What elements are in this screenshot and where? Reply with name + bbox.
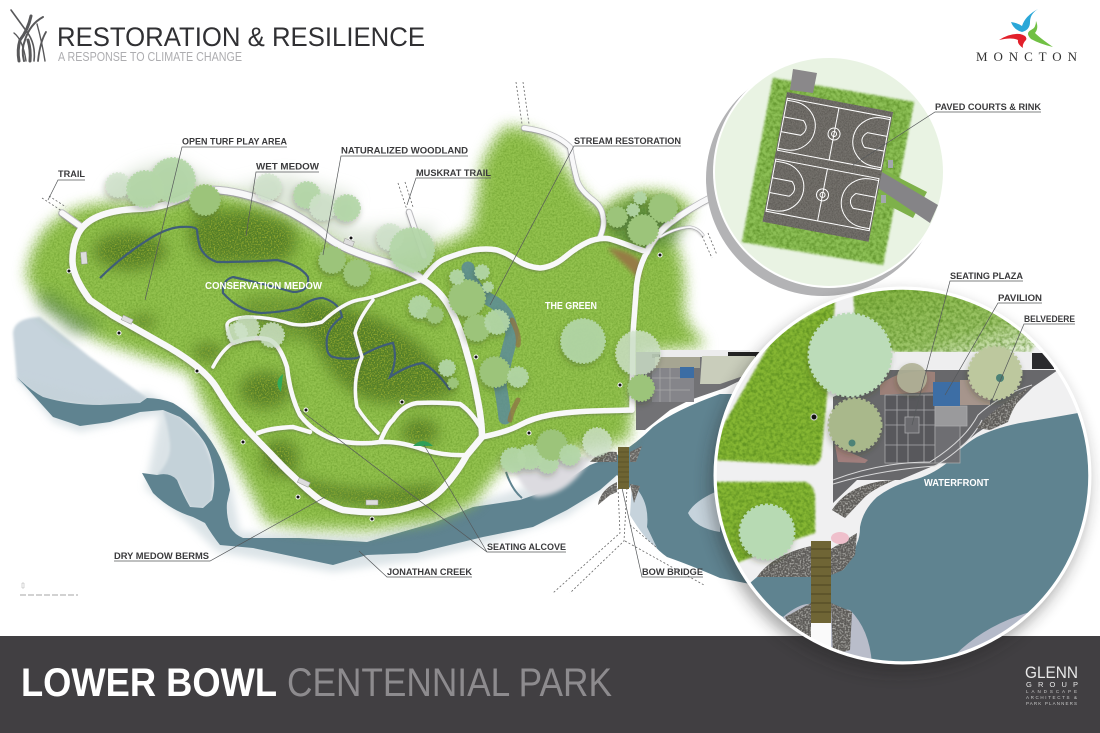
callout: Trail xyxy=(48,169,85,200)
title: RESTORATION & RESILIENCE xyxy=(57,22,425,52)
pale shoreline areas xyxy=(630,484,657,548)
callout: Pavilion xyxy=(945,293,1042,395)
inset turf north-east xyxy=(852,290,1036,354)
callout: Dry Medow Berms xyxy=(114,497,325,562)
paved courts xyxy=(762,92,893,242)
callout: Bow Bridge xyxy=(622,488,704,578)
darker woodland floor xyxy=(40,201,681,335)
lavender sandbars xyxy=(783,604,872,665)
callout: Stream Restoration xyxy=(490,136,681,305)
Jonathan Creek water xyxy=(17,377,630,565)
plaza pavement xyxy=(833,370,1058,503)
callout: Seating Alcove xyxy=(300,410,567,553)
logo: Moncton: MONCTON xyxy=(976,49,1078,64)
footer title xyxy=(21,661,612,705)
panel: waterfront inset circle xyxy=(710,285,1100,672)
stream restoration channel xyxy=(468,268,518,420)
access path xyxy=(878,160,938,223)
callout: Stream Restoration: STREAM RESTORATION xyxy=(574,136,681,147)
wet meadow planting areas xyxy=(94,211,452,506)
footer band xyxy=(0,636,1100,733)
bow bridge inset xyxy=(811,541,831,623)
callout: Wet Medow: WET MEDOW xyxy=(256,162,320,172)
pale flood plain west xyxy=(13,317,213,508)
planting beds xyxy=(880,371,935,395)
meadow grass xyxy=(27,127,706,530)
callout: Paved Courts and Rink xyxy=(853,102,1041,165)
icon: scale bar xyxy=(20,583,78,595)
logo: Glenn Group: LANDSCAPE xyxy=(1026,689,1077,694)
trees xyxy=(106,158,677,473)
waterfront plaza xyxy=(636,350,770,430)
belvedere walkway curve xyxy=(833,385,1032,484)
dashed trail extensions xyxy=(42,82,717,593)
logo: Glenn Group xyxy=(1025,664,1078,706)
subtitle: A RESPONSE TO CLIMATE CHANGE xyxy=(58,50,242,64)
tree halo north of meadow xyxy=(105,160,435,268)
inset turf south-west xyxy=(715,482,815,563)
callout: Muskrat Trail: MUSKRAT TRAIL xyxy=(416,168,491,179)
label: The Green: THE GREEN xyxy=(545,301,597,312)
blue pavilion xyxy=(933,382,960,406)
callout: Naturalized Woodland xyxy=(323,146,468,255)
callout: Wet Medow xyxy=(246,162,320,236)
icon: reed grass logo xyxy=(11,10,46,61)
inset path south of bridge xyxy=(811,623,831,647)
inset turf west xyxy=(715,300,835,465)
callout: Naturalized Woodland: NATURALIZED WOODLAND xyxy=(341,146,468,156)
courts turf xyxy=(742,78,914,265)
brown patch of stream bank xyxy=(607,248,641,280)
trail shading xyxy=(62,128,712,280)
conservation meadow stream xyxy=(100,227,450,390)
inset lake xyxy=(750,410,1100,670)
callout: Jonathan Creek xyxy=(359,551,472,578)
east lake xyxy=(622,394,780,590)
callout: Trail: TRAIL xyxy=(58,169,85,180)
callout: Belvedere: BELVEDERE xyxy=(1024,314,1076,325)
footer title: CENTENNIAL PARK xyxy=(287,661,612,705)
callout: Belvedere xyxy=(990,314,1076,405)
rocky shoreline xyxy=(757,385,1033,655)
trail network xyxy=(62,128,712,512)
callout: Jonathan Creek: JONATHAN CREEK xyxy=(387,567,472,578)
callout: Open Turf Play Area: OPEN TURF PLAY AREA xyxy=(182,136,287,148)
callout: Paved Courts and Rink: PAVED COURTS & RINK xyxy=(935,102,1041,113)
logo: Glenn Group: PARK PLANNERS xyxy=(1026,701,1077,706)
label: Conservation Medow: CONSERVATION MEDOW xyxy=(205,281,323,292)
label: Waterfront: WATERFRONT xyxy=(924,478,989,489)
footer title: LOWER BOWL xyxy=(21,661,277,705)
inset trees xyxy=(740,314,1021,559)
callout: Seating Plaza: SEATING PLAZA xyxy=(950,271,1023,282)
cove shadow xyxy=(506,456,592,498)
benches and lights xyxy=(67,236,662,521)
callout: Muskrat Trail xyxy=(407,168,491,205)
callout: Dry Medow Berms: DRY MEDOW BERMS xyxy=(114,551,210,562)
logo: Glenn Group: ARCHITECTS & xyxy=(1026,695,1077,700)
rocky shore xyxy=(590,446,642,505)
logo: Glenn Group: GROUP xyxy=(1026,680,1078,689)
soft halo around creek xyxy=(17,377,617,572)
callout: Seating Alcove: SEATING ALCOVE xyxy=(487,542,567,553)
callout: Pavilion: PAVILION xyxy=(998,293,1042,304)
callout: Bow Bridge: BOW BRIDGE xyxy=(642,567,704,578)
logo: Moncton xyxy=(976,9,1078,64)
paved upper walk xyxy=(895,352,1030,354)
entry plaza xyxy=(790,69,817,93)
light fixture xyxy=(811,414,817,420)
panel: courts inset circle xyxy=(706,56,945,296)
icon: bow bridge xyxy=(618,447,629,489)
seating alcoves xyxy=(277,374,433,446)
tiled plaza xyxy=(885,395,967,463)
panel: park site plan xyxy=(13,82,780,593)
logo: Glenn Group: GLENN xyxy=(1025,664,1078,682)
pink flowering shrubs xyxy=(831,532,849,544)
callout: Seating Plaza xyxy=(912,271,1023,425)
callout: Open Turf Play Area xyxy=(145,136,287,300)
